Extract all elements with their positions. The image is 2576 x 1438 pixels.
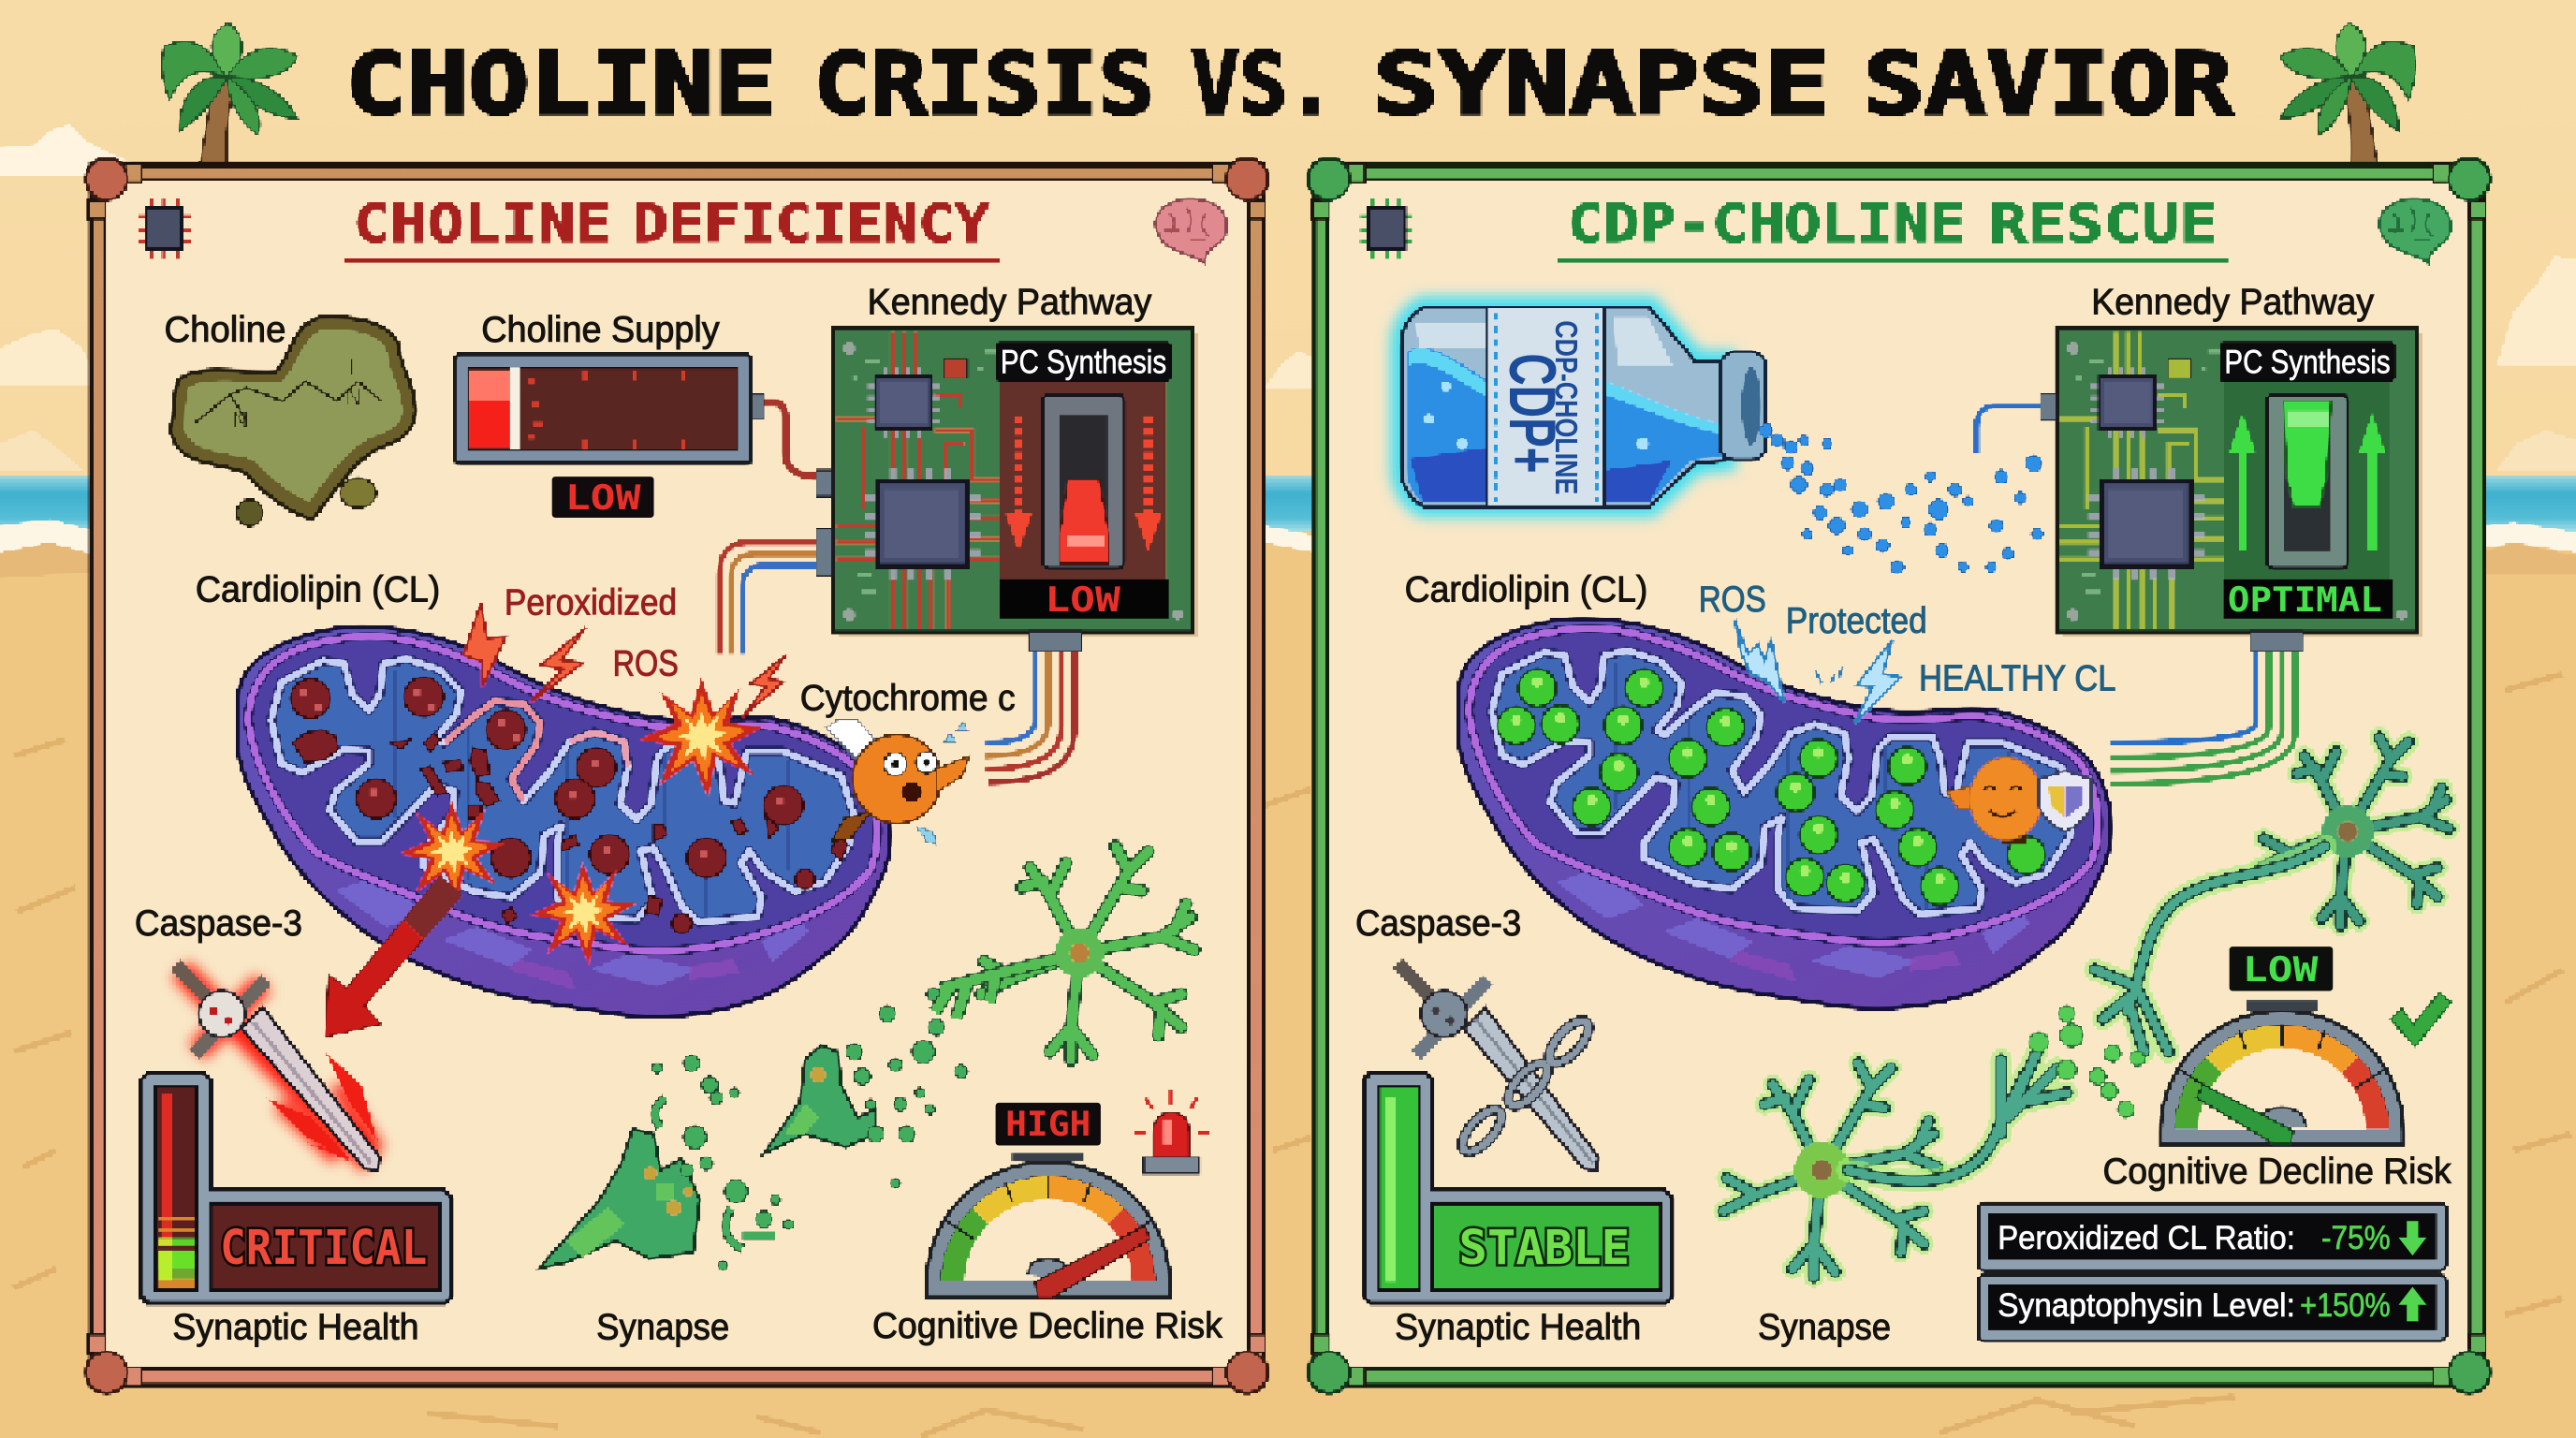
stat: synaptophysin level: +150%	[2300, 1287, 2391, 1324]
badge: high: HIGH	[1005, 1104, 1090, 1144]
sea	[0, 477, 2576, 533]
icon: low battery	[455, 355, 818, 477]
label: kennedy pathway: Kennedy Pathway	[2091, 282, 2375, 322]
label: healthy cl: HEALTHY CL	[1919, 658, 2116, 698]
panel frame	[86, 158, 1267, 1393]
label: synaptic health: Synaptic Health	[172, 1308, 419, 1348]
explosion	[639, 677, 764, 799]
icon: choline blob	[171, 317, 416, 526]
title	[345, 34, 2232, 134]
label: bottle text: CDP+	[1496, 353, 1570, 474]
icon: chip	[138, 198, 191, 259]
axon	[1848, 1051, 2067, 1181]
heading	[1567, 194, 2217, 255]
badge: supply low	[552, 477, 654, 518]
label: peroxidized: Peroxidized	[505, 583, 677, 624]
panel: cdp-choline rescue	[1309, 158, 2490, 1393]
title: CRISIS	[813, 34, 1155, 134]
neuron	[2261, 738, 2449, 926]
stat: peroxidized cl ratio: Peroxidized CL Ratio:	[1998, 1220, 2295, 1256]
icon: check mark	[2391, 992, 2452, 1047]
label: synapse: Synapse	[596, 1308, 729, 1348]
heading: CHOLINE	[353, 194, 612, 255]
heading	[353, 194, 990, 255]
status: critical: CRITICAL	[220, 1221, 427, 1276]
icon: brain	[1156, 198, 1227, 263]
title: VS.	[1191, 34, 1336, 134]
label: cytochrome c: Cytochrome c	[800, 678, 1016, 718]
label: choline supply: Choline Supply	[481, 310, 720, 350]
label: protected: Protected	[1786, 601, 1927, 641]
label: ros: ROS	[613, 643, 679, 683]
label: bottle text	[1496, 320, 1583, 494]
panel: choline deficiency	[86, 158, 1267, 1393]
mitochondrion: damaged	[238, 627, 890, 1017]
mitochondrion: healthy	[1459, 619, 2111, 1008]
label: switch low: LOW	[1045, 580, 1121, 620]
label: switch optimal: OPTIMAL	[2228, 580, 2382, 620]
badge: low	[2230, 946, 2333, 991]
damaged cardiolipin particles	[291, 677, 848, 933]
icon: left palm	[162, 23, 298, 165]
panel frame	[1309, 158, 2490, 1393]
icon: protected cytochrome c	[1947, 757, 2091, 844]
title: CHOLINE	[345, 34, 775, 134]
heading: RESCUE	[1989, 194, 2217, 255]
chain	[1456, 1015, 1595, 1158]
label: pc synthesis: PC Synthesis	[1001, 344, 1166, 380]
cognitive risk gauge: high	[927, 1152, 1170, 1299]
label: cardiolipin: Cardiolipin (CL)	[196, 569, 440, 609]
icon: ROS bolts	[463, 603, 787, 716]
chip wires	[1976, 406, 2295, 784]
icon: right palm	[2280, 23, 2416, 165]
icon: caspase-3 sword chained	[1398, 963, 1599, 1170]
neuron	[1723, 1064, 1937, 1277]
neurotransmitter dots	[2029, 1005, 2144, 1118]
chip wires	[720, 542, 1075, 783]
icon: blocked ROS bolts	[1734, 620, 1901, 723]
panel labels: deficiency	[135, 282, 1222, 1348]
label: cognitive decline risk: Cognitive Decline Risk	[872, 1306, 1222, 1346]
sand	[0, 520, 2576, 1438]
title: SAVIOR	[1863, 34, 2232, 134]
icon: fleeing cytochrome c	[827, 720, 970, 844]
heading: CDP-CHOLINE	[1567, 194, 1966, 255]
label: synaptic health: Synaptic Health	[1395, 1308, 1641, 1348]
label: kennedy pathway: Kennedy Pathway	[868, 282, 1152, 322]
cognitive risk gauge: low	[2160, 1001, 2404, 1146]
label: bottle text: CDP-CHOLINE	[1548, 320, 1583, 494]
title: SYNAPSE	[1373, 34, 1830, 134]
switch panel	[2219, 342, 2395, 620]
explosion	[399, 801, 505, 904]
axon	[2095, 846, 2324, 1051]
icon: chip	[1360, 198, 1412, 259]
circuit board: kennedy pathway	[816, 329, 1197, 651]
badge: low: LOW	[2243, 949, 2319, 990]
label: pc synthesis: PC Synthesis	[2224, 344, 2391, 380]
stat: peroxidized cl ratio: -75%	[2321, 1220, 2391, 1256]
panel labels: rescue	[1355, 282, 2452, 1348]
icon: brain	[2379, 198, 2451, 263]
heading: DEFICIENCY	[633, 194, 990, 255]
badge: supply low: LOW	[565, 477, 641, 518]
status: stable: STABLE	[1459, 1221, 1630, 1276]
label: cognitive decline risk: Cognitive Decline Risk	[2103, 1152, 2452, 1192]
label: ros: ROS	[1699, 580, 1766, 620]
icon: cdp-choline bottle	[1401, 307, 1766, 506]
icon: choline blob: N	[345, 385, 361, 410]
protected cardiolipin particles	[1498, 669, 2045, 905]
circuit board: kennedy pathway	[2041, 329, 2422, 651]
arrow: damage to caspase	[326, 876, 461, 1037]
stat boxes frame	[1978, 1203, 2446, 1341]
synaptic health gauge: stable	[1364, 1073, 1673, 1303]
label: choline: Choline	[165, 310, 285, 350]
icon: choline blob: N	[231, 407, 248, 433]
switch panel	[996, 342, 1171, 620]
icon: caspase-3 sword active	[176, 964, 379, 1170]
stat: synaptophysin level: Synaptophysin Level:	[1998, 1287, 2295, 1324]
icon: alarm light	[1135, 1090, 1209, 1173]
icon: clouds	[0, 125, 2576, 470]
synapse: broken fragments	[539, 988, 968, 1270]
label: synapse: Synapse	[1758, 1308, 1891, 1348]
label: cardiolipin: Cardiolipin (CL)	[1405, 569, 1647, 609]
synaptic health gauge: critical	[141, 1073, 452, 1303]
explosion	[530, 862, 637, 965]
label: caspase-3: Caspase-3	[135, 903, 302, 944]
blue droplets	[1760, 424, 2042, 574]
neuron network: restored synapse	[1723, 738, 2449, 1277]
label: caspase-3: Caspase-3	[1355, 903, 1521, 944]
neuron	[935, 846, 1194, 1060]
